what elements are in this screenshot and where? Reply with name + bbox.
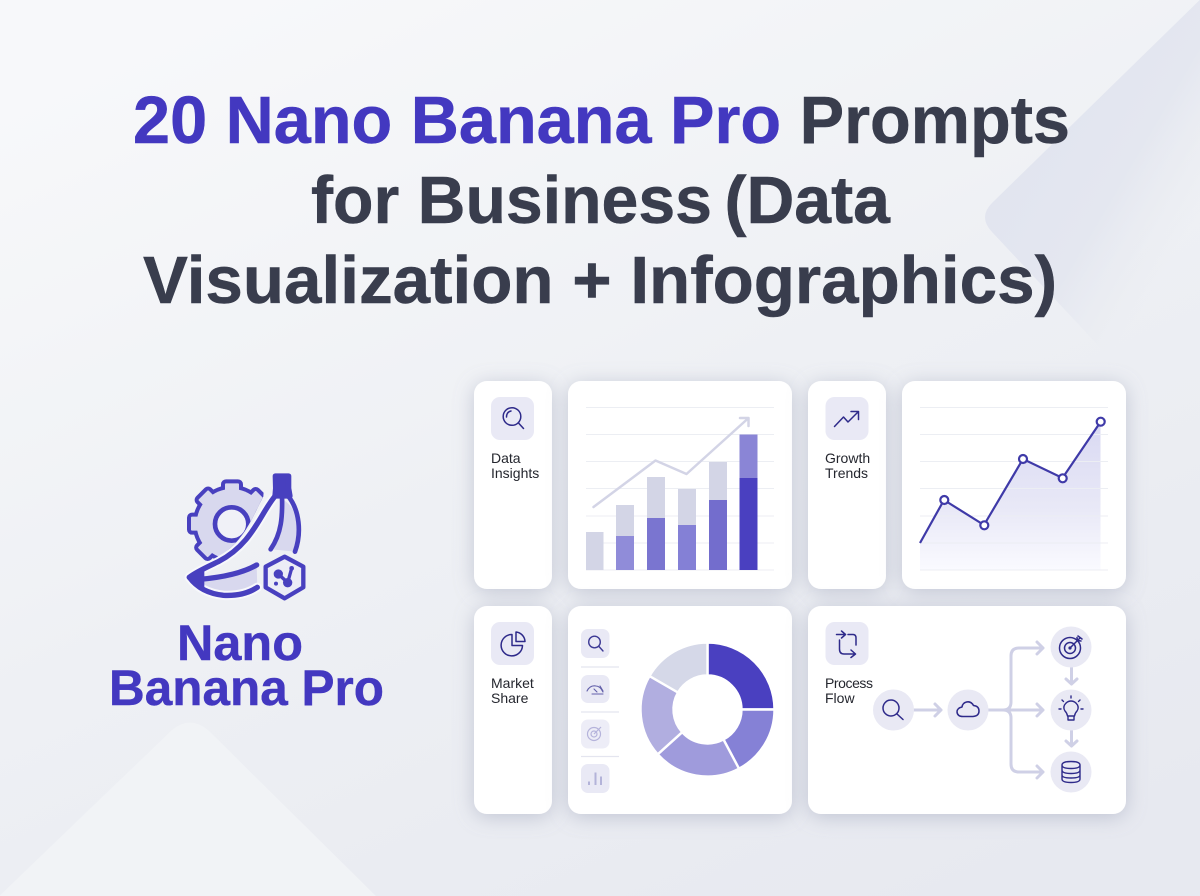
icon: trend arrow <box>826 397 868 440</box>
logo wordmark: Banana Pro <box>109 660 384 716</box>
panel: line chart <box>902 381 1126 589</box>
panel: data insights label <box>474 381 552 589</box>
panel: market share label <box>474 606 552 814</box>
icon: small target <box>581 720 610 748</box>
node: search <box>873 690 914 730</box>
panel: process flow <box>808 606 1126 814</box>
text: growth trends: Growth <box>825 450 870 466</box>
logo wordmark <box>109 615 384 716</box>
logo wordmark: Nano <box>177 615 303 671</box>
text: process flow: Process <box>825 675 873 691</box>
node: cloud <box>948 690 988 730</box>
icon: small magnifier <box>581 629 610 658</box>
text: market share: Share <box>491 690 529 706</box>
title: for Business (Data <box>311 163 891 238</box>
text: growth trends: Trends <box>825 465 868 481</box>
node: target <box>1050 626 1092 668</box>
panel: donut chart <box>568 606 792 814</box>
donut <box>641 642 775 777</box>
title: Visualization + Infographics) <box>143 243 1057 318</box>
title <box>133 83 1070 318</box>
arrow: trend <box>594 418 748 507</box>
text: process flow: Flow <box>825 690 855 706</box>
icon: gear <box>191 483 272 565</box>
logo icon: gear and banana with hexagon <box>189 476 303 598</box>
node: database <box>1050 752 1092 792</box>
icon: magnifier <box>491 397 534 440</box>
panel: growth trends label <box>808 381 886 589</box>
node: lightbulb <box>1050 690 1092 730</box>
title: 20 Nano Banana Pro Prompts <box>133 83 1070 158</box>
text: data insights: Insights <box>491 465 539 481</box>
arrows: flow connectors <box>914 642 1077 778</box>
panel: bar chart <box>568 381 792 589</box>
icon: small bars <box>581 764 610 793</box>
bars <box>586 434 758 570</box>
area fill <box>920 422 1100 570</box>
icon: process loop <box>826 622 868 665</box>
data line <box>920 418 1105 543</box>
text: market share: Market <box>491 675 534 691</box>
icon: banana <box>189 476 299 595</box>
icon: hexagon network <box>266 557 303 598</box>
text: data insights: Data <box>491 450 521 466</box>
icon: pie <box>491 622 534 665</box>
icon: small gauge <box>581 675 610 703</box>
